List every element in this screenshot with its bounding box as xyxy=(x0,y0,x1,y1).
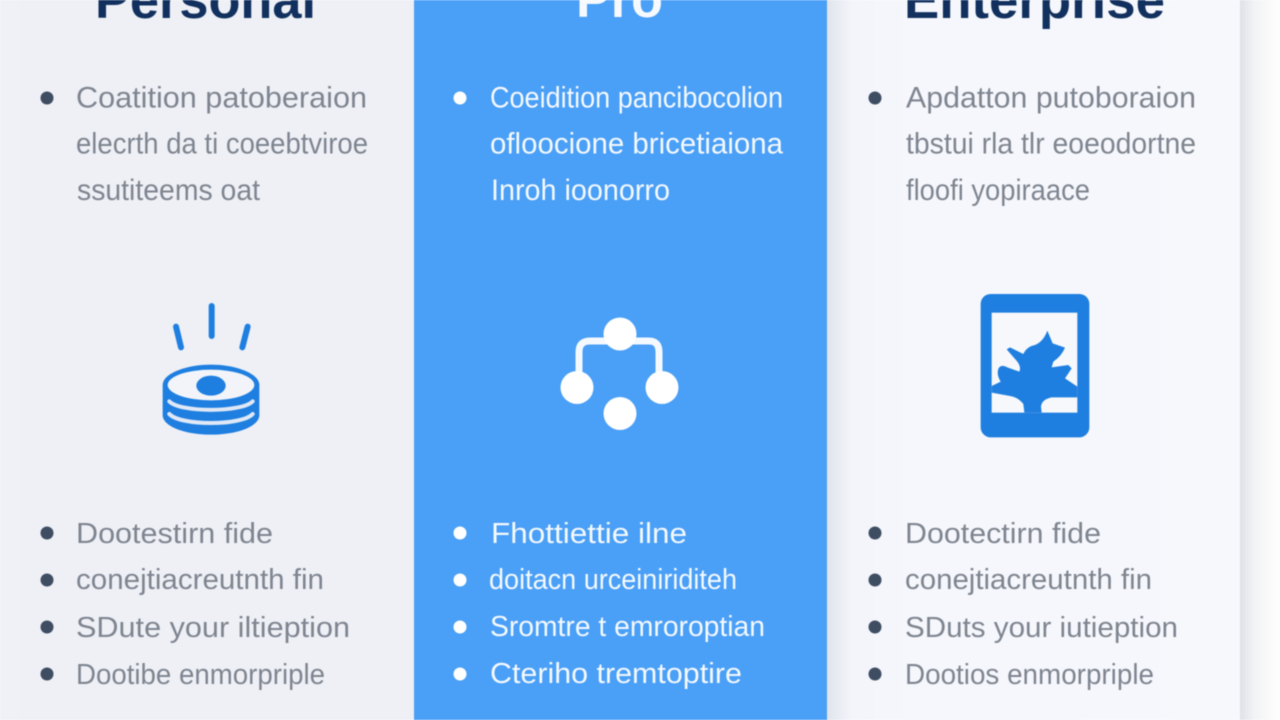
feature list: Enterprise bottom xyxy=(868,518,1178,691)
icon: stacked disk with rays xyxy=(163,306,259,435)
feature list: Enterprise top: Apdatton putoboraion xyxy=(906,82,1196,114)
feature list: Pro bottom xyxy=(454,518,765,690)
feature list: Enterprise bottom: Dootios enmorpriple xyxy=(905,659,1154,691)
right edge shadow xyxy=(1240,0,1280,720)
feature list: Personal bottom xyxy=(40,518,350,691)
feature list: Personal top xyxy=(40,82,368,207)
feature list: Enterprise top xyxy=(868,82,1196,207)
feature list: Pro bottom: Fhottiettie ilne xyxy=(491,518,687,550)
feature list: Enterprise bottom: conejtiacreutnth fin xyxy=(905,564,1152,596)
feature list: Pro top: ofloocione bricetiaiona xyxy=(490,128,783,160)
feature list: Personal bottom: Dootestirn fide xyxy=(76,518,273,550)
feature list: Personal top: elecrth da ti coeebtviroe xyxy=(76,128,368,160)
feature list: Pro bottom: Sromtre t emroroptian xyxy=(490,611,765,643)
icon: connected nodes xyxy=(560,318,678,430)
panel: Enterprise xyxy=(827,0,1240,720)
feature list: Pro top xyxy=(454,82,783,207)
feature list: Pro top: Coeidition pancibocolion xyxy=(490,82,783,114)
panel: Personal xyxy=(0,0,414,720)
feature list: Pro bottom: Cteriho tremtoptire xyxy=(490,658,742,690)
feature list: Personal top: Coatition patoberaion xyxy=(76,82,367,114)
feature list: Enterprise top: tbstui rla tlr eoeodortne xyxy=(906,128,1196,160)
feature list: Personal bottom: SDute your iltieption xyxy=(76,612,350,644)
feature list: Enterprise bottom: SDuts your iutieption xyxy=(905,612,1178,644)
feature list: Enterprise bottom: Dootectirn fide xyxy=(905,518,1101,550)
feature list: Personal bottom: Dootibe enmorpriple xyxy=(76,659,325,691)
icon: leaf in tablet frame xyxy=(981,294,1089,437)
feature list: Pro bottom: doitacn urceiniriditeh xyxy=(489,564,737,596)
feature list: Enterprise top: floofi yopiraace xyxy=(906,174,1090,207)
feature list: Pro top: Inroh ioonorro xyxy=(491,174,670,207)
feature list: Personal top: ssutiteems oat xyxy=(77,174,261,207)
feature list: Personal bottom: conejtiacreutnth fin xyxy=(76,564,324,596)
panel: Pro xyxy=(414,0,827,720)
